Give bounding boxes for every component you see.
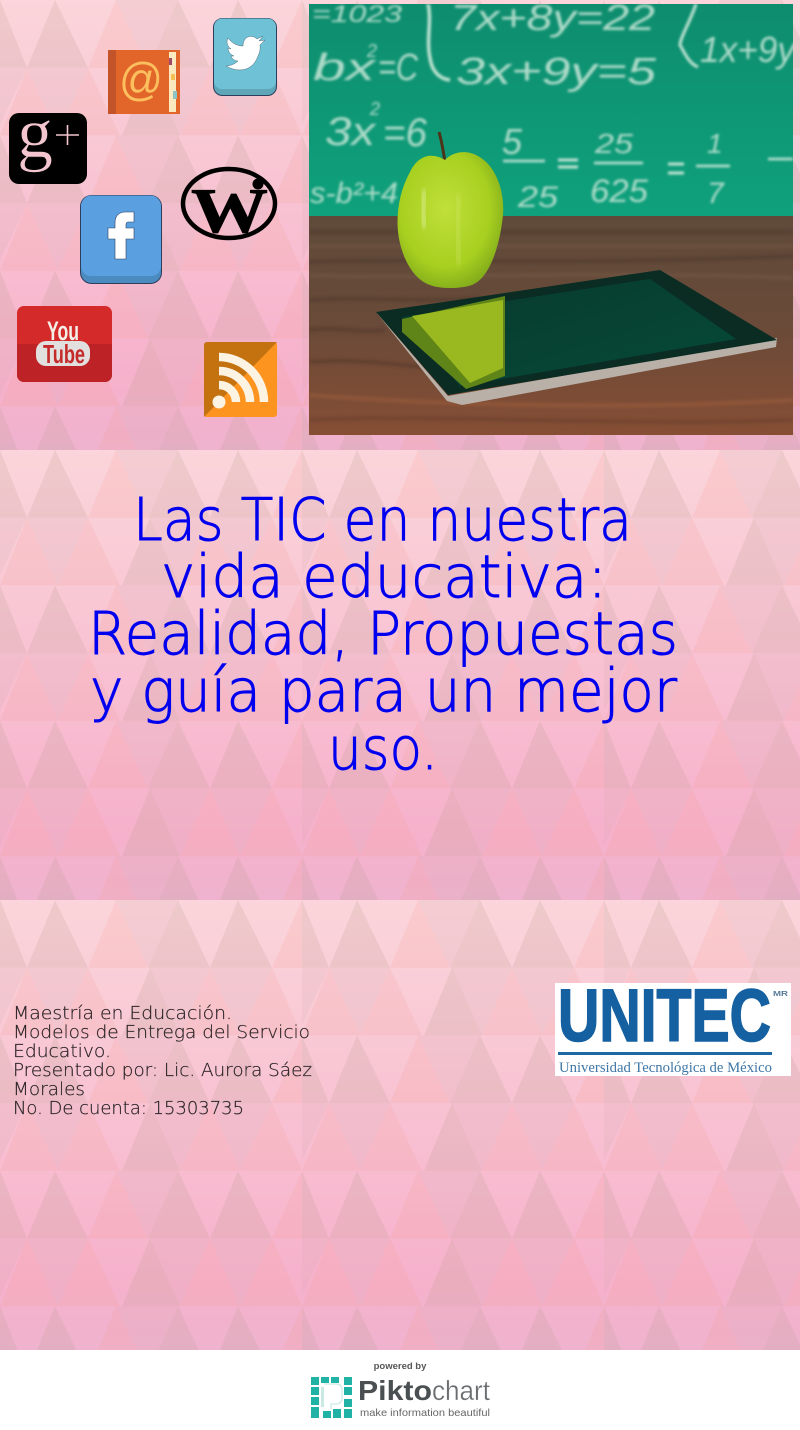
icon: youtube <box>17 306 112 382</box>
logo mark <box>311 1377 352 1418</box>
icon: twitter <box>214 18 276 96</box>
chalkboard: =C <box>378 47 418 89</box>
text block: author details: Modelos de Entrega del Servicio <box>13 1022 310 1043</box>
icon: youtube: Tube <box>43 339 85 369</box>
title: y guía para un mejor <box>90 656 678 725</box>
chalkboard: s-b²+4 <box>310 177 398 210</box>
chalkboard <box>309 0 797 216</box>
footer: Piktochart branding: make information beautiful <box>360 1407 490 1419</box>
title <box>88 485 678 783</box>
title: Las TIC en nuestra <box>133 485 632 554</box>
tablet <box>376 270 777 405</box>
chalkboard: 3x+9y=5 <box>456 51 657 93</box>
footer: Piktochart branding <box>0 1350 800 1430</box>
icon: address book <box>108 50 180 114</box>
text block: author details: Educativo. <box>13 1041 111 1062</box>
icon: rss <box>204 342 277 417</box>
footer: Piktochart branding: chart <box>432 1375 490 1406</box>
chalkboard: 1x+9y <box>700 29 797 70</box>
title: uso. <box>328 714 438 783</box>
logo: UNITEC: Universidad Tecnológica de México <box>559 1060 772 1076</box>
logo: UNITEC: MR <box>773 989 789 998</box>
title: vida educativa: <box>161 542 607 611</box>
chalkboard: 5 <box>502 121 523 162</box>
panel: bottom background <box>0 900 800 1350</box>
title: Realidad, Propuestas <box>88 599 678 668</box>
chalkboard: bx <box>313 47 378 89</box>
chalkboard: 3x <box>325 110 377 154</box>
icon: google plus <box>9 93 87 184</box>
footer: Piktochart branding: powered by <box>374 1361 427 1372</box>
wooden desk <box>309 216 793 435</box>
text block: author details: Presentado por: Lic. Aurora Sáez <box>13 1060 312 1081</box>
icon: wordpress: W <box>191 176 268 246</box>
chalkboard: =1023 <box>312 1 403 28</box>
icon: google plus: g <box>17 93 53 173</box>
chalkboard: 25 <box>594 128 634 159</box>
photo: apple and tablet on a desk in front of a chalkboard <box>309 0 797 435</box>
chalkboard: 2 <box>366 41 377 61</box>
chalkboard: 1 <box>707 128 723 159</box>
text block: author details <box>13 1003 312 1119</box>
chalkboard: 25 <box>517 181 558 214</box>
icon: wordpress <box>183 169 275 246</box>
icon: youtube: You <box>47 316 79 346</box>
chalkboard: 625 <box>590 173 648 209</box>
footer: Piktochart branding: Pikto <box>358 1375 432 1406</box>
chalkboard: =6 <box>383 111 428 155</box>
panel: top background <box>0 0 800 450</box>
icon: address book: @ <box>119 53 163 105</box>
text block: author details: Maestría en Educación. <box>13 1003 232 1024</box>
text block: author details: No. De cuenta: 15303735 <box>13 1098 244 1119</box>
panel: middle background <box>0 450 800 900</box>
chalkboard: 2 <box>369 99 380 119</box>
chalkboard: 7 <box>707 177 725 210</box>
apple <box>398 132 503 288</box>
text block: author details: Morales <box>13 1079 85 1100</box>
icon: facebook <box>80 196 162 284</box>
